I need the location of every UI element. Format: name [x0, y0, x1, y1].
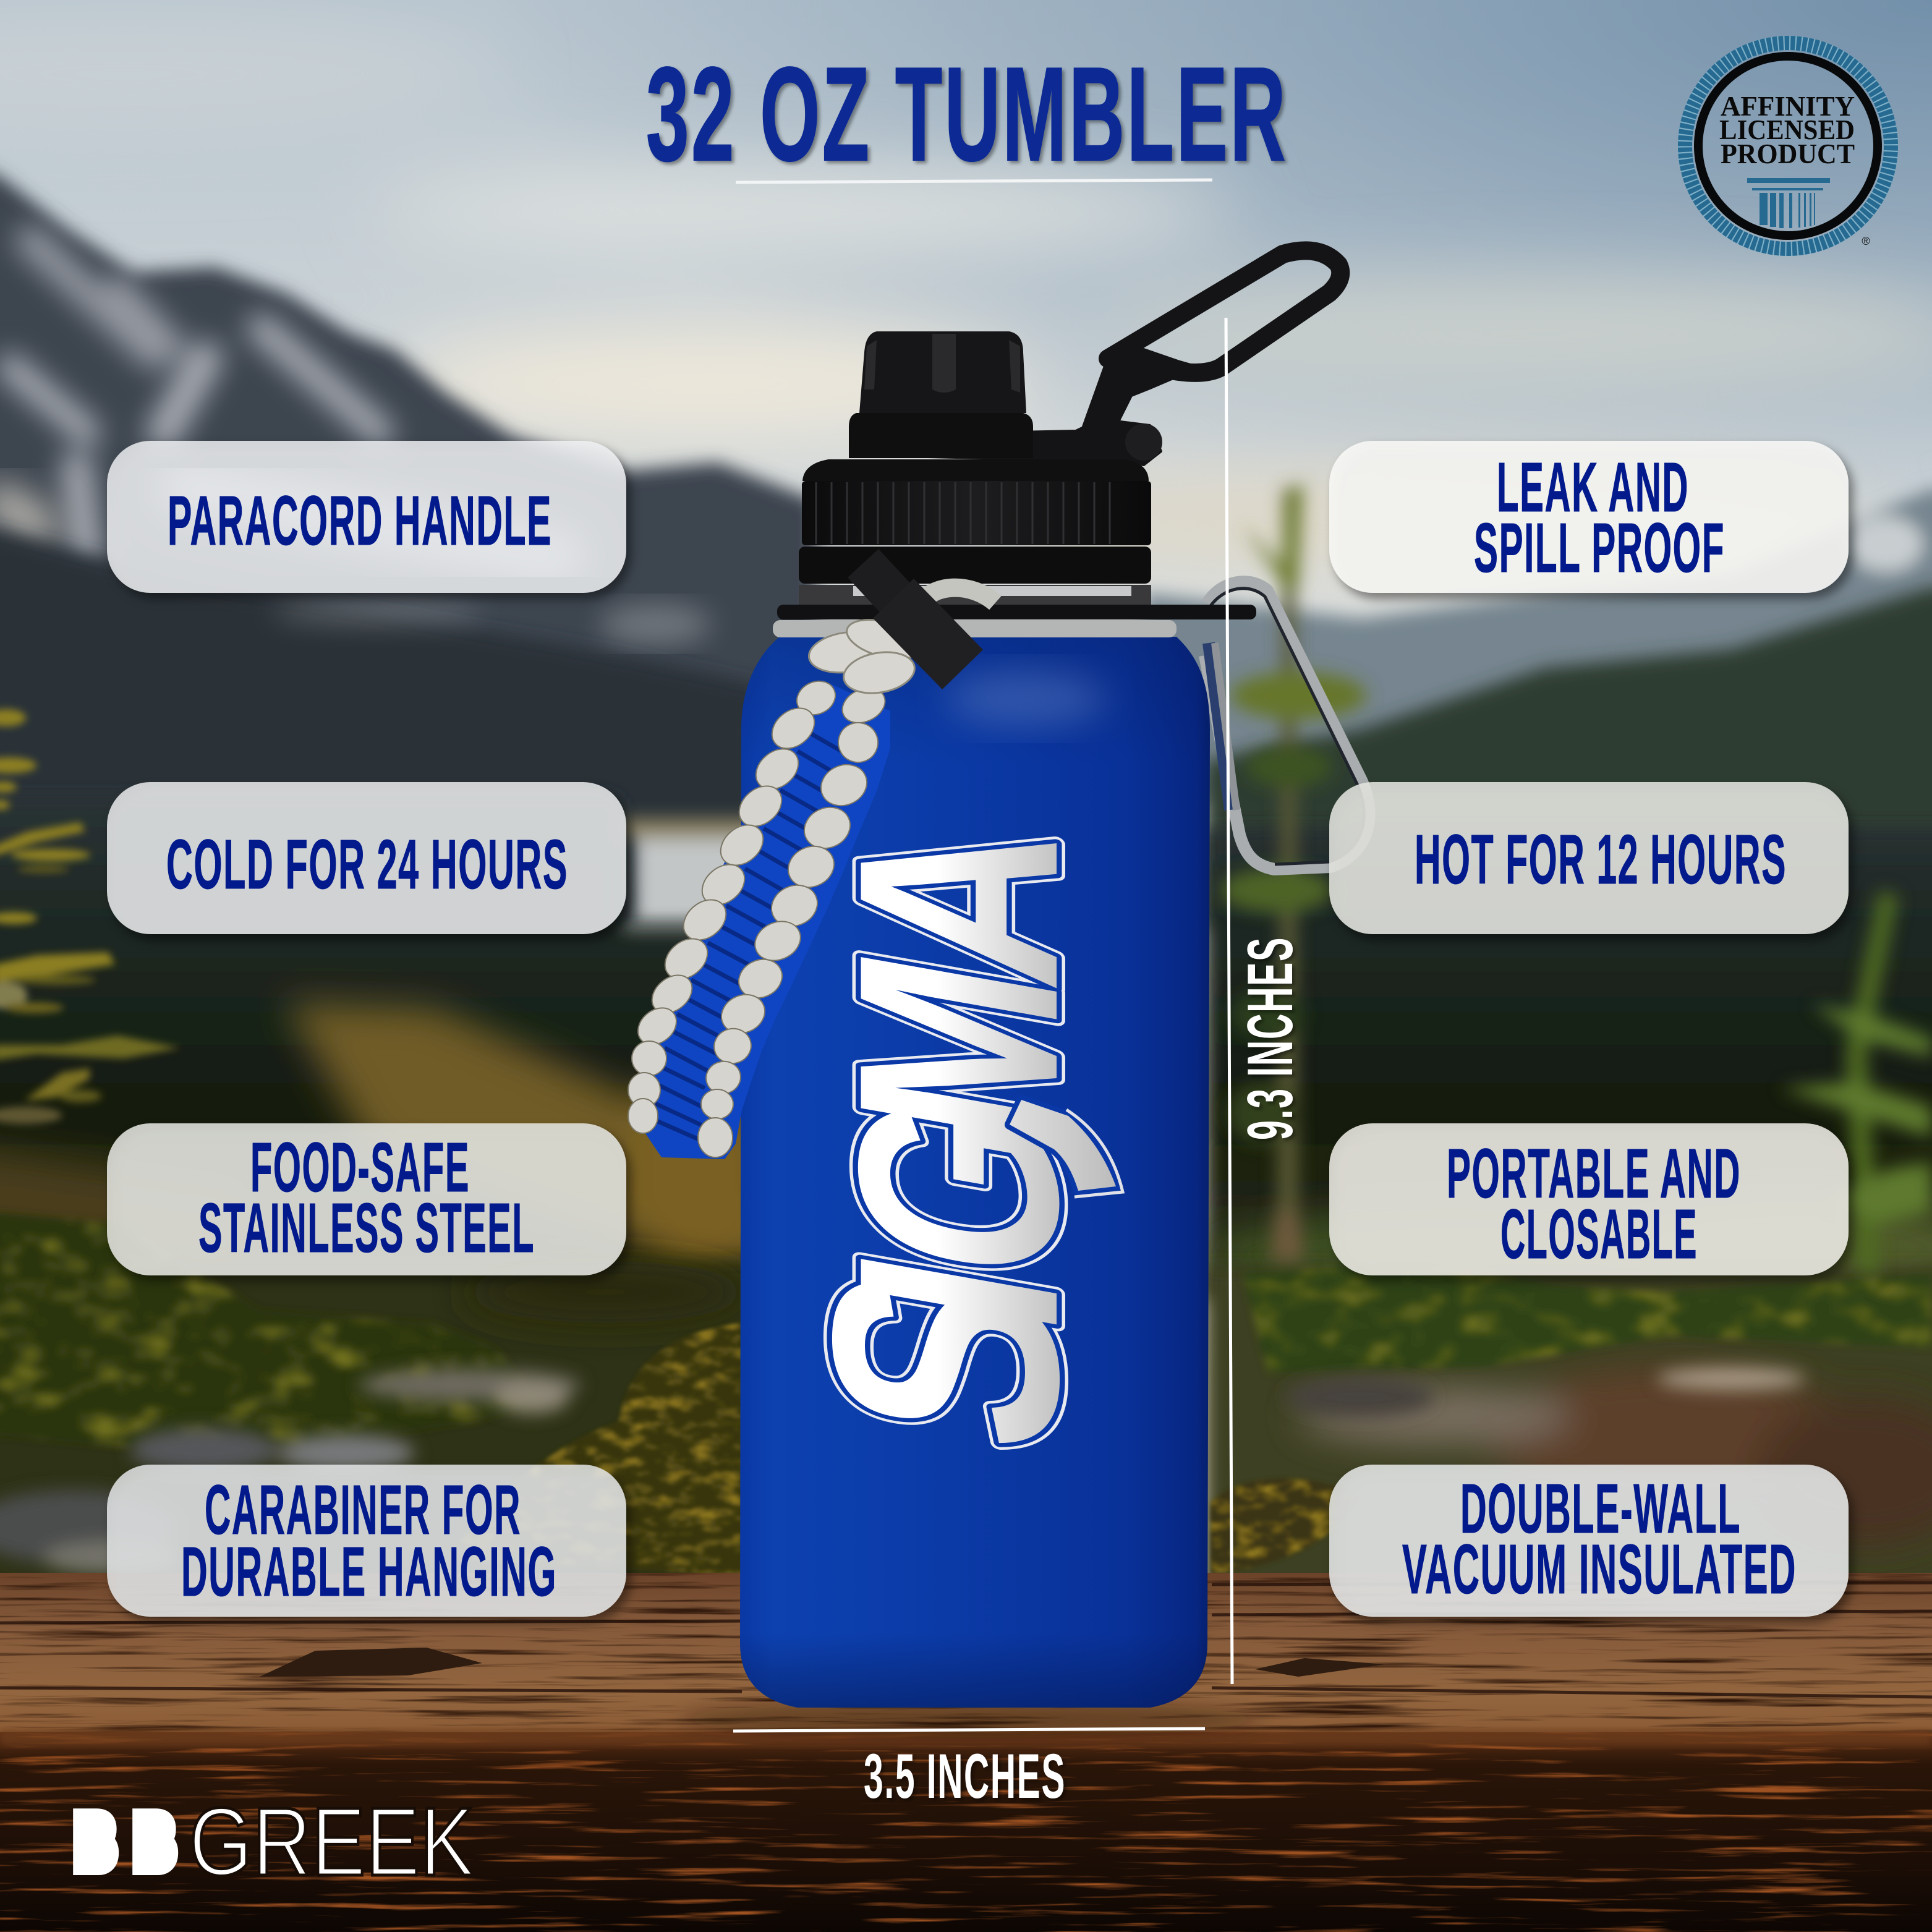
snow behind pill [0, 488, 556, 556]
SIGMA lettering: SIGMA [765, 786, 1125, 1472]
paracord strap [628, 675, 891, 1159]
panel: leak and spill proof [1329, 441, 1849, 593]
sharp foreground shrubs [451, 1323, 1360, 1577]
cord toggle [863, 563, 963, 670]
panel: paracord handle [107, 441, 626, 593]
logo: BB Greek: BB [75, 1802, 174, 1883]
logo: BB Greek [75, 1788, 474, 1896]
mountain snow streaks [11, 241, 380, 553]
logo: BB Greek: GREEK [189, 1788, 474, 1896]
panel: food-safe stainless steel: STAINLESS STEEL [198, 1189, 535, 1267]
SIGMA lettering: SIGMA [765, 786, 1125, 1472]
left tree branches [0, 709, 181, 1124]
width dimension line [733, 1729, 1205, 1731]
width label: 3.5 INCHES [864, 1741, 1066, 1811]
panel: carabiner for durable hanging: CARABINER FOR [205, 1471, 521, 1549]
dark foothills [0, 513, 1932, 927]
panel: double-wall vacuum insulated [1329, 1465, 1849, 1617]
panel: food-safe stainless steel: FOOD-SAFE [250, 1128, 470, 1206]
SIGMA lettering: SIGMA [765, 786, 1125, 1472]
left mountain [0, 124, 816, 866]
far right ridges [1144, 488, 1932, 804]
badge: affinity licensed product: ® [1862, 235, 1870, 247]
blurred shrubs and rocks [464, 1261, 1932, 1546]
badge: affinity licensed product: AFFINITY [1721, 90, 1855, 122]
panel: carabiner for durable hanging: DURABLE HANGING [181, 1533, 557, 1611]
panel: portable and closable [1329, 1123, 1849, 1275]
table: wooden plank [0, 1573, 1932, 1932]
mid-distance foliage [0, 1212, 1932, 1447]
panel: hot for 12 hours [1329, 782, 1849, 934]
title underline [736, 180, 1212, 182]
panel: portable and closable: CLOSABLE [1500, 1195, 1698, 1273]
height label: 9.3 INCHES [1235, 937, 1306, 1140]
screw lid [773, 459, 1256, 637]
badge: affinity licensed product: LICENSED [1719, 114, 1855, 145]
tumbler bottle [628, 250, 1340, 1708]
right tree [1781, 890, 1932, 1274]
panel: leak and spill proof: LEAK AND [1497, 448, 1689, 526]
badge: affinity licensed product [1685, 43, 1891, 249]
title: 32 OZ TUMBLER [646, 39, 1288, 189]
height dimension line [1226, 318, 1232, 1684]
spout cap [849, 331, 1033, 458]
panel: cold for 24 hours: COLD FOR 24 HOURS [166, 825, 568, 903]
panel: carabiner for durable hanging [107, 1465, 626, 1617]
cord loop [921, 588, 995, 603]
carabiner [1205, 582, 1369, 869]
bottle body [740, 637, 1210, 1708]
handle loop [928, 250, 1340, 465]
badge: affinity licensed product: PRODUCT [1721, 138, 1855, 169]
panel: cold for 24 hours [107, 782, 626, 934]
lake [606, 819, 808, 925]
paracord knot [806, 613, 926, 699]
panel: food-safe stainless steel [107, 1123, 626, 1275]
centre-right tree [1221, 482, 1366, 1261]
panel: paracord handle: PARACORD HANDLE [168, 482, 552, 560]
